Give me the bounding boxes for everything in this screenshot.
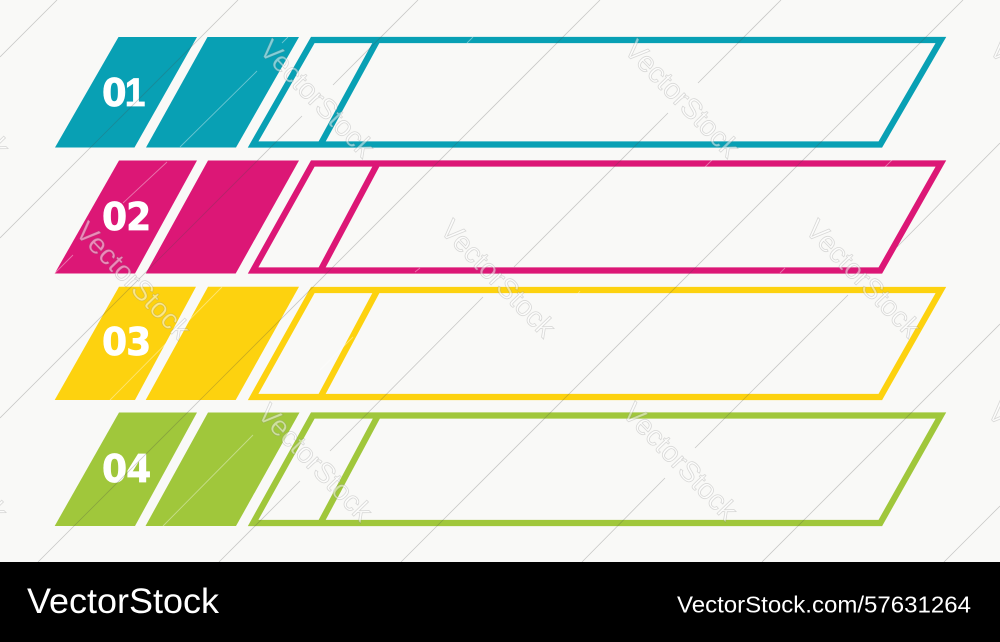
row 4: green banner (55, 412, 941, 526)
watermarks: VectorStock (617, 396, 745, 527)
number 02: 02 (102, 195, 150, 239)
green outlined box (253, 416, 941, 523)
yellow outlined box (253, 290, 941, 397)
pink solid tab (146, 160, 299, 274)
teal outlined box (253, 40, 941, 144)
number 04: 04 (102, 447, 151, 491)
yellow number tab (55, 287, 196, 400)
pink divider (320, 164, 378, 270)
row 2: pink banner (55, 160, 941, 274)
watermarks: VectorStock (619, 33, 747, 164)
watermarks: VectorStock (252, 397, 380, 528)
green solid tab (146, 412, 300, 526)
number 01: 01 (102, 71, 145, 115)
watermarks (0, 33, 1000, 528)
pink number tab (55, 160, 197, 274)
watermarks: VectorStock (800, 213, 928, 344)
number 03: 03 (102, 320, 150, 364)
pink outlined box (253, 164, 941, 270)
green number tab (55, 412, 197, 526)
teal solid tab (146, 37, 299, 148)
yellow solid tab (146, 287, 299, 400)
footer image id: VectorStock.com/57631264 (677, 592, 971, 618)
green divider (320, 416, 378, 523)
teal number tab (55, 37, 197, 148)
watermarks: VectorStock (254, 33, 382, 164)
row 3: yellow banner (55, 287, 941, 400)
footer logo text: VectorStock (27, 582, 220, 621)
footer bar (0, 562, 1000, 642)
watermarks: VectorStock (70, 215, 198, 346)
watermarks: VectorStock (435, 213, 563, 344)
yellow divider (320, 290, 378, 397)
row 1: teal banner (55, 37, 941, 148)
teal divider (320, 40, 378, 144)
